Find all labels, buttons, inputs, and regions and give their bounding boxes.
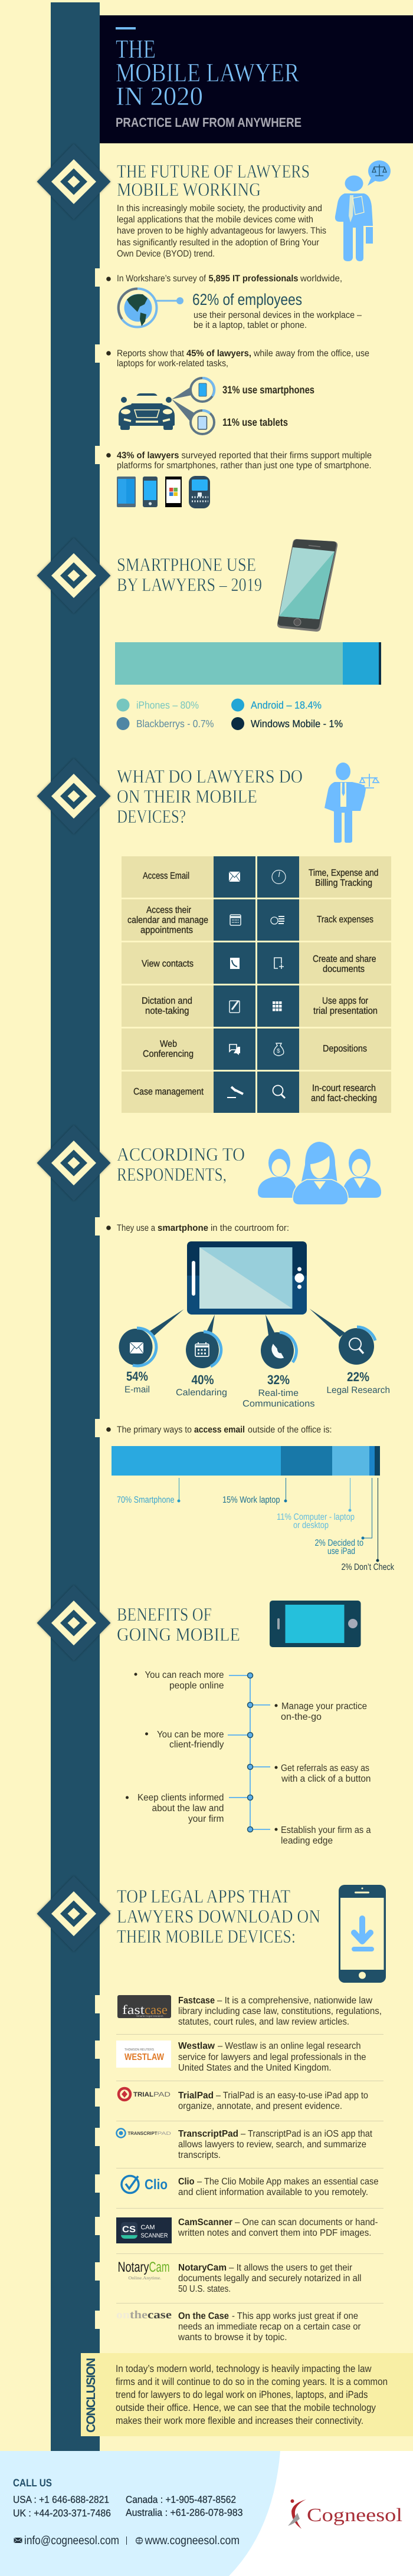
- logo: clio: Clio: [145, 2177, 168, 2193]
- app: transcriptpad: TranscriptPad: [178, 2129, 238, 2139]
- conclusion text: trend for lawyers to do legal work on iPhones, laptops, and iPads: [116, 2389, 368, 2400]
- app: camscanner: – One can scan documents or hand-: [235, 2217, 378, 2227]
- legend: Blackberrys - 0.7%: [136, 718, 214, 730]
- logo: westlaw: THOMSON REUTERS: [124, 2048, 154, 2052]
- bar labels with leader lines: or desktop: [293, 1520, 329, 1530]
- stat: 62% of employees: [192, 291, 362, 330]
- bullet: smartphone in the courtroom: [106, 1223, 289, 1233]
- app: clio: – The Clio Mobile App makes an essential case: [197, 2177, 379, 2187]
- node: legal research 22%: [309, 1309, 390, 1395]
- row: access email / time tracking: [122, 856, 391, 898]
- legend: [117, 698, 343, 730]
- app: trialpad: TrialPad: [178, 2091, 214, 2101]
- icon: car with device circles: [119, 378, 214, 434]
- task grid: [122, 856, 391, 1113]
- section: the future of lawyers mobile working: [37, 144, 391, 508]
- app: westlaw: [116, 2041, 366, 2073]
- icons: four smartphones: [117, 476, 210, 508]
- app: westlaw: United States and the United Kingdom.: [178, 2063, 332, 2073]
- benefit: keep clients informed: your firm: [188, 1814, 224, 1824]
- app: on the case: On the Case: [178, 2311, 229, 2321]
- node: legal research 22%: 22%: [347, 1369, 369, 1384]
- logo: camscanner: [116, 2217, 172, 2243]
- app: fastcase: library including case law, constitutions, regulations,: [178, 2006, 382, 2016]
- benefit: referrals: [275, 1763, 371, 1784]
- section: top legal apps: [37, 1876, 386, 2342]
- device stats: 31% use smartphones: [222, 384, 314, 396]
- app: fastcase: Fastcase: [178, 1996, 215, 2006]
- app: clio: [122, 2176, 379, 2197]
- app: camscanner: CamScanner: [178, 2217, 232, 2227]
- logo: fastcase: fast: [122, 2002, 145, 2017]
- panel: conclusion: [81, 2353, 413, 2436]
- contact details: Canada : +1-905-487-8562: [126, 2494, 236, 2505]
- benefit: reach more people: [135, 1670, 224, 1691]
- benefits timeline: [126, 1670, 371, 1846]
- row: case management / in-court research: Case management: [133, 1087, 204, 1097]
- conclusion text: makes their work more flexible and increases their connectivity.: [116, 2415, 363, 2426]
- diamond marker: [37, 1876, 111, 1951]
- benefit: reach more people: people online: [169, 1681, 224, 1691]
- app: trialpad: – TrialPad is an easy-to-use iPad app to: [216, 2091, 368, 2101]
- email and website: info@cogneesol.com: [24, 2534, 119, 2547]
- heading: WHAT DO LAWYERS DO: [117, 765, 303, 787]
- benefit: client-friendly: [145, 1730, 224, 1750]
- logo: transcriptpad: TRANSCRIPT: [127, 2131, 158, 2136]
- logo: clio: [122, 2176, 168, 2193]
- logo: westlaw: [116, 2041, 171, 2068]
- logo: trialpad: TRIAL: [133, 2091, 153, 2098]
- app: transcriptpad: – TranscriptPad is an iOS app that: [241, 2129, 373, 2139]
- app: westlaw: Westlaw: [178, 2041, 215, 2051]
- bullet: access email: access email: [194, 1425, 245, 1435]
- intro paragraph: has significantly resulted in the adoption of Bring Your: [117, 238, 319, 248]
- node: e-mail 54%: 54%: [126, 1369, 148, 1384]
- email and website: www.cogneesol.com: [145, 2534, 240, 2547]
- icon: phone with download arrow: [339, 1885, 386, 1983]
- logo: fastcase: [117, 1995, 171, 2018]
- heading: ON THEIR MOBILE: [117, 786, 257, 807]
- app: on the case: [116, 2309, 361, 2342]
- intro paragraph: Own Device (BYOD) trend.: [117, 249, 215, 259]
- contact details: Australia : +61-286-078-983: [126, 2507, 243, 2518]
- logo: fastcase: Smarter legal research: [136, 2015, 163, 2018]
- bar labels with leader lines: 2% Don’t Check: [341, 1562, 394, 1572]
- icon: three respondents: [258, 1142, 381, 1205]
- diamond marker: [37, 758, 111, 834]
- row: calendar / track expenses: [122, 899, 391, 941]
- bullet: 43% of lawyers: 43% of lawyers: [117, 451, 179, 461]
- logo: onthecase: the: [130, 2309, 148, 2321]
- device stats: 11% use tablets: [222, 416, 288, 428]
- section: benefits of going mobile: [37, 1585, 371, 1846]
- logo: onthecase: on: [116, 2309, 130, 2321]
- row: web conferencing / depositions: Conferencing: [143, 1049, 194, 1059]
- stacked bar chart: [115, 642, 381, 685]
- row: web conferencing / depositions: Depositions: [323, 1044, 367, 1054]
- app: transcriptpad: [117, 2129, 373, 2160]
- benefit: manage practice: [275, 1701, 367, 1722]
- logo: camscanner: CAM: [140, 2224, 155, 2231]
- logo: notarycam: Cam: [149, 2259, 170, 2275]
- heading: SMARTPHONE USE: [117, 554, 256, 575]
- contact details: CALL US: [13, 2477, 52, 2489]
- heading: TOP LEGAL APPS THAT: [117, 1885, 290, 1907]
- benefit: manage practice: Manage your practice: [281, 1701, 367, 1711]
- row: web conferencing / depositions: $: [277, 1048, 280, 1054]
- logo: onthecase: case: [148, 2309, 172, 2321]
- logo: trialpad: [119, 2088, 171, 2100]
- bullet: smartphone in the courtroom: in the courtroom for:: [211, 1223, 289, 1233]
- benefit: leading edge: leading edge: [281, 1836, 333, 1846]
- row: access email / time tracking: Access Email: [143, 871, 189, 881]
- contact details: UK : +44-203-371-7486: [13, 2508, 111, 2519]
- icon: landscape phone: [270, 1601, 361, 1647]
- row: view contacts / create documents: View contacts: [142, 959, 194, 969]
- title: IN 2020: [116, 81, 203, 111]
- row: case management / in-court research: In-court research: [312, 1083, 376, 1093]
- row: dictation / trial presentation: Dictation and: [142, 996, 192, 1006]
- row: access email / time tracking: Billing Tracking: [315, 878, 372, 888]
- logo: notarycam: [118, 2259, 170, 2281]
- heading: THE FUTURE OF LAWYERS: [117, 160, 310, 182]
- heading: BY LAWYERS – 2019: [117, 574, 262, 595]
- app: westlaw: – Westlaw is an online legal research: [218, 2041, 361, 2051]
- benefit: leading edge: Establish your firm as a: [281, 1825, 371, 1835]
- bar labels with leader lines: 2% Decided to: [315, 1538, 363, 1548]
- diamond marker: [37, 1125, 111, 1201]
- node: e-mail 54%: [119, 1309, 184, 1395]
- row: access email / time tracking: Time, Expense and: [309, 868, 379, 878]
- row: calendar / track expenses: calendar and manage: [127, 915, 208, 925]
- app: fastcase: statutes, court rules, and law review articles.: [178, 2017, 349, 2027]
- conclusion text: [116, 2363, 388, 2426]
- app: camscanner: written notes and convert them into PDF images.: [178, 2228, 372, 2238]
- conclusion text: outside their office. Hence, we can see that the mobile technology: [116, 2402, 376, 2413]
- benefit: manage practice: on-the-go: [281, 1712, 322, 1722]
- icon: tilted smartphone: [277, 539, 337, 632]
- intro paragraph: have proven to be highly advantageous for lawyers. This: [117, 226, 326, 236]
- stat: 62% of employees: use their personal devices in the workplace –: [194, 310, 362, 320]
- node: calendaring 40%: Calendaring: [176, 1388, 227, 1398]
- row: calendar / track expenses: Access their: [146, 905, 192, 915]
- node: real-time communications 32%: [242, 1315, 315, 1409]
- logo: cogneesol: Cogneesol: [307, 2504, 402, 2525]
- node: e-mail 54%: E-mail: [124, 1385, 150, 1395]
- icon: globe: [118, 289, 183, 327]
- row: web conferencing / depositions: Web: [160, 1039, 177, 1049]
- benefit: referrals: Get referrals as easy as: [281, 1763, 369, 1773]
- app: westlaw: service for lawyers and legal professionals in the: [178, 2052, 366, 2062]
- contact details: USA : +1 646-688-2821: [13, 2494, 109, 2505]
- bullet: workshare survey: [106, 274, 342, 284]
- legend: iPhones – 80%: [136, 699, 199, 711]
- app: notarycam: – It allows the users to get their: [229, 2263, 353, 2273]
- logo: westlaw: WESTLAW: [124, 2052, 165, 2062]
- bar labels with leader lines: 11% Computer - laptop: [277, 1512, 355, 1522]
- logo: transcriptpad: PAD: [157, 2131, 171, 2136]
- bullet: 45% of lawyers: while away from the office, use: [253, 349, 369, 359]
- contact details: [13, 2477, 243, 2519]
- app: clio: and client information available to you remotely.: [178, 2187, 368, 2197]
- logo: notarycam: Notary: [118, 2259, 149, 2275]
- heading: [117, 1144, 245, 1185]
- device stats: [222, 384, 314, 428]
- heading: DEVICES?: [117, 806, 186, 827]
- benefit: referrals: with a click of a button: [281, 1774, 371, 1784]
- bullet: access email: outside of the office is:: [248, 1425, 332, 1435]
- app: on the case: wants to browse it by topic.: [178, 2332, 287, 2342]
- logo: trialpad: PAD: [153, 2091, 171, 2098]
- stacked bar: email access: [112, 1446, 380, 1476]
- heading: GOING MOBILE: [117, 1624, 240, 1645]
- bullet: 43% of lawyers: platforms for smartphones, rather than just one type of smartphone.: [117, 461, 372, 471]
- node: calendaring 40%: 40%: [191, 1372, 214, 1387]
- app: on the case: needs an immediate recap on a certain case or: [178, 2322, 361, 2332]
- diamond marker: [37, 538, 111, 613]
- logo: camscanner: CS: [122, 2225, 136, 2235]
- row: web conferencing / depositions: [122, 1029, 391, 1070]
- app: trialpad: [119, 2088, 368, 2111]
- heading: [117, 1885, 320, 1947]
- row: view contacts / create documents: [122, 942, 391, 984]
- intro paragraph: legal applications that the mobile devices come with: [117, 215, 313, 225]
- heading: [117, 554, 262, 595]
- row: view contacts / create documents: Create and share: [313, 954, 376, 964]
- row: dictation / trial presentation: [122, 985, 391, 1027]
- header banner: [100, 15, 413, 143]
- icon: lawyer holding scales: [324, 763, 379, 843]
- section: smartphone use by lawyers 2019: [37, 538, 381, 730]
- row: view contacts / create documents: documents: [323, 964, 365, 974]
- row: calendar / track expenses: Track expenses: [317, 915, 373, 925]
- benefit: keep clients informed: [126, 1793, 224, 1824]
- row: dictation / trial presentation: trial presentation: [313, 1006, 378, 1016]
- bullet: workshare survey: worldwide,: [300, 274, 342, 284]
- bullet: access email: The primary ways to: [117, 1425, 192, 1435]
- bullet: 45% of lawyers: 45% of lawyers,: [186, 349, 251, 359]
- sidebar column: [51, 2, 100, 2451]
- conclusion text: In today’s modern world, technology is heavily impacting the law: [116, 2363, 372, 2374]
- logo: notarycam: Online.Anytime.: [129, 2275, 162, 2281]
- icon: tablet: [187, 1241, 307, 1315]
- heading: [117, 160, 310, 200]
- app: transcriptpad: allows lawyers to review, search, and summarize: [178, 2140, 366, 2150]
- benefit: client-friendly: You can be more: [157, 1730, 224, 1740]
- bar labels with leader lines: use iPad: [327, 1546, 355, 1556]
- bar labels with leader lines: [117, 1478, 394, 1572]
- heading: THEIR MOBILE DEVICES:: [117, 1926, 296, 1947]
- bullet: 43% of lawyers: surveyed reported that their firms support multiple: [182, 451, 372, 461]
- legend: Windows Mobile - 1%: [251, 718, 343, 730]
- row: dictation / trial presentation: Use apps for: [322, 996, 369, 1006]
- node: real-time communications 32%: 32%: [267, 1372, 290, 1387]
- app: trialpad: organize, annotate, and present evidence.: [178, 2101, 342, 2111]
- intro paragraph: In this increasingly mobile society, the productivity and: [117, 203, 322, 213]
- bullet: smartphone in the courtroom: smartphone: [158, 1223, 208, 1233]
- row: case management / in-court research: [122, 1072, 391, 1113]
- bullet: 43% of lawyers: [106, 451, 372, 471]
- bullet: smartphone in the courtroom: They use a: [117, 1223, 155, 1233]
- bullet: workshare survey: 5,895 IT professionals: [209, 274, 299, 284]
- logo: cogneesol: [288, 2499, 402, 2529]
- logo: camscanner: SCANNER: [140, 2232, 168, 2239]
- benefit: leading edge: [275, 1825, 371, 1846]
- row: case management / in-court research: and fact-checking: [311, 1093, 377, 1103]
- conclusion label: CONCLUSION: [84, 2358, 98, 2433]
- heading: MOBILE WORKING: [117, 179, 261, 200]
- logo: fastcase: case: [145, 2002, 168, 2017]
- node: calendaring 40%: [176, 1315, 227, 1398]
- app: notarycam: documents legally and securely notarized in all: [178, 2273, 361, 2283]
- app: notarycam: [118, 2259, 361, 2294]
- diamond marker: [37, 1585, 111, 1661]
- benefit: keep clients informed: about the law and: [152, 1803, 224, 1813]
- heading: LAWYERS DOWNLOAD ON: [117, 1905, 320, 1927]
- logo: transcriptpad: [117, 2129, 171, 2137]
- node: legal research 22%: Legal Research: [327, 1385, 390, 1395]
- benefit: keep clients informed: Keep clients informed: [137, 1793, 224, 1803]
- bullet: access email: [106, 1425, 332, 1435]
- subtitle: PRACTICE LAW FROM ANYWHERE: [116, 115, 301, 130]
- bar labels with leader lines: 15% Work laptop: [222, 1495, 280, 1505]
- app: notarycam: NotaryCam: [178, 2263, 227, 2273]
- app: clio: Clio: [178, 2177, 195, 2187]
- section: according to respondents: [37, 1125, 394, 1572]
- heading: ACCORDING TO: [117, 1144, 245, 1165]
- node: real-time communications 32%: Communications: [242, 1399, 315, 1409]
- app: on the case: - This app works just great if one: [232, 2311, 358, 2321]
- row: dictation / trial presentation: note-taking: [145, 1006, 189, 1016]
- stat: 62% of employees: be it a laptop, tablet or phone.: [194, 320, 307, 330]
- section: what do lawyers do on their mobile devices: [37, 758, 391, 1113]
- bullet: 45% of lawyers: [106, 349, 369, 369]
- legend: Android – 18.4%: [251, 699, 322, 711]
- app: notarycam: 50 U.S. states.: [178, 2284, 231, 2294]
- title: THE: [116, 34, 156, 64]
- title: MOBILE LAWYER: [116, 58, 299, 87]
- bullet: workshare survey: In Workshare’s survey of: [117, 274, 206, 284]
- email and website: [14, 2534, 240, 2547]
- logo: onthecase: [116, 2309, 172, 2321]
- app: camscanner: [116, 2217, 378, 2243]
- app: fastcase: [117, 1995, 382, 2027]
- heading: [117, 765, 303, 827]
- stat: 62% of employees: 62% of employees: [192, 291, 302, 308]
- app: fastcase: – It is a comprehensive, nationwide law: [217, 1996, 372, 2006]
- heading: RESPONDENTS,: [117, 1164, 227, 1185]
- bullet: 45% of lawyers: laptops for work-related tasks,: [117, 359, 228, 369]
- diamond marker: [37, 144, 111, 219]
- bullet: 45% of lawyers: Reports show that: [117, 349, 185, 359]
- title: [116, 34, 299, 111]
- conclusion text: firms and it will continue to do so in the coming years. It is a common: [116, 2376, 388, 2387]
- benefit: reach more people: You can reach more: [145, 1670, 224, 1680]
- intro paragraph: [117, 203, 326, 259]
- icon: lawyer with scales bubble: [335, 160, 391, 261]
- footer: [0, 2451, 413, 2576]
- app: transcriptpad: transcripts.: [178, 2150, 221, 2160]
- heading: [117, 1604, 240, 1645]
- bar labels with leader lines: 70% Smartphone: [117, 1495, 175, 1505]
- node: real-time communications 32%: Real-time: [258, 1388, 299, 1398]
- row: calendar / track expenses: appointments: [140, 925, 193, 935]
- heading: BENEFITS OF: [117, 1604, 212, 1625]
- benefit: client-friendly: client-friendly: [169, 1740, 224, 1750]
